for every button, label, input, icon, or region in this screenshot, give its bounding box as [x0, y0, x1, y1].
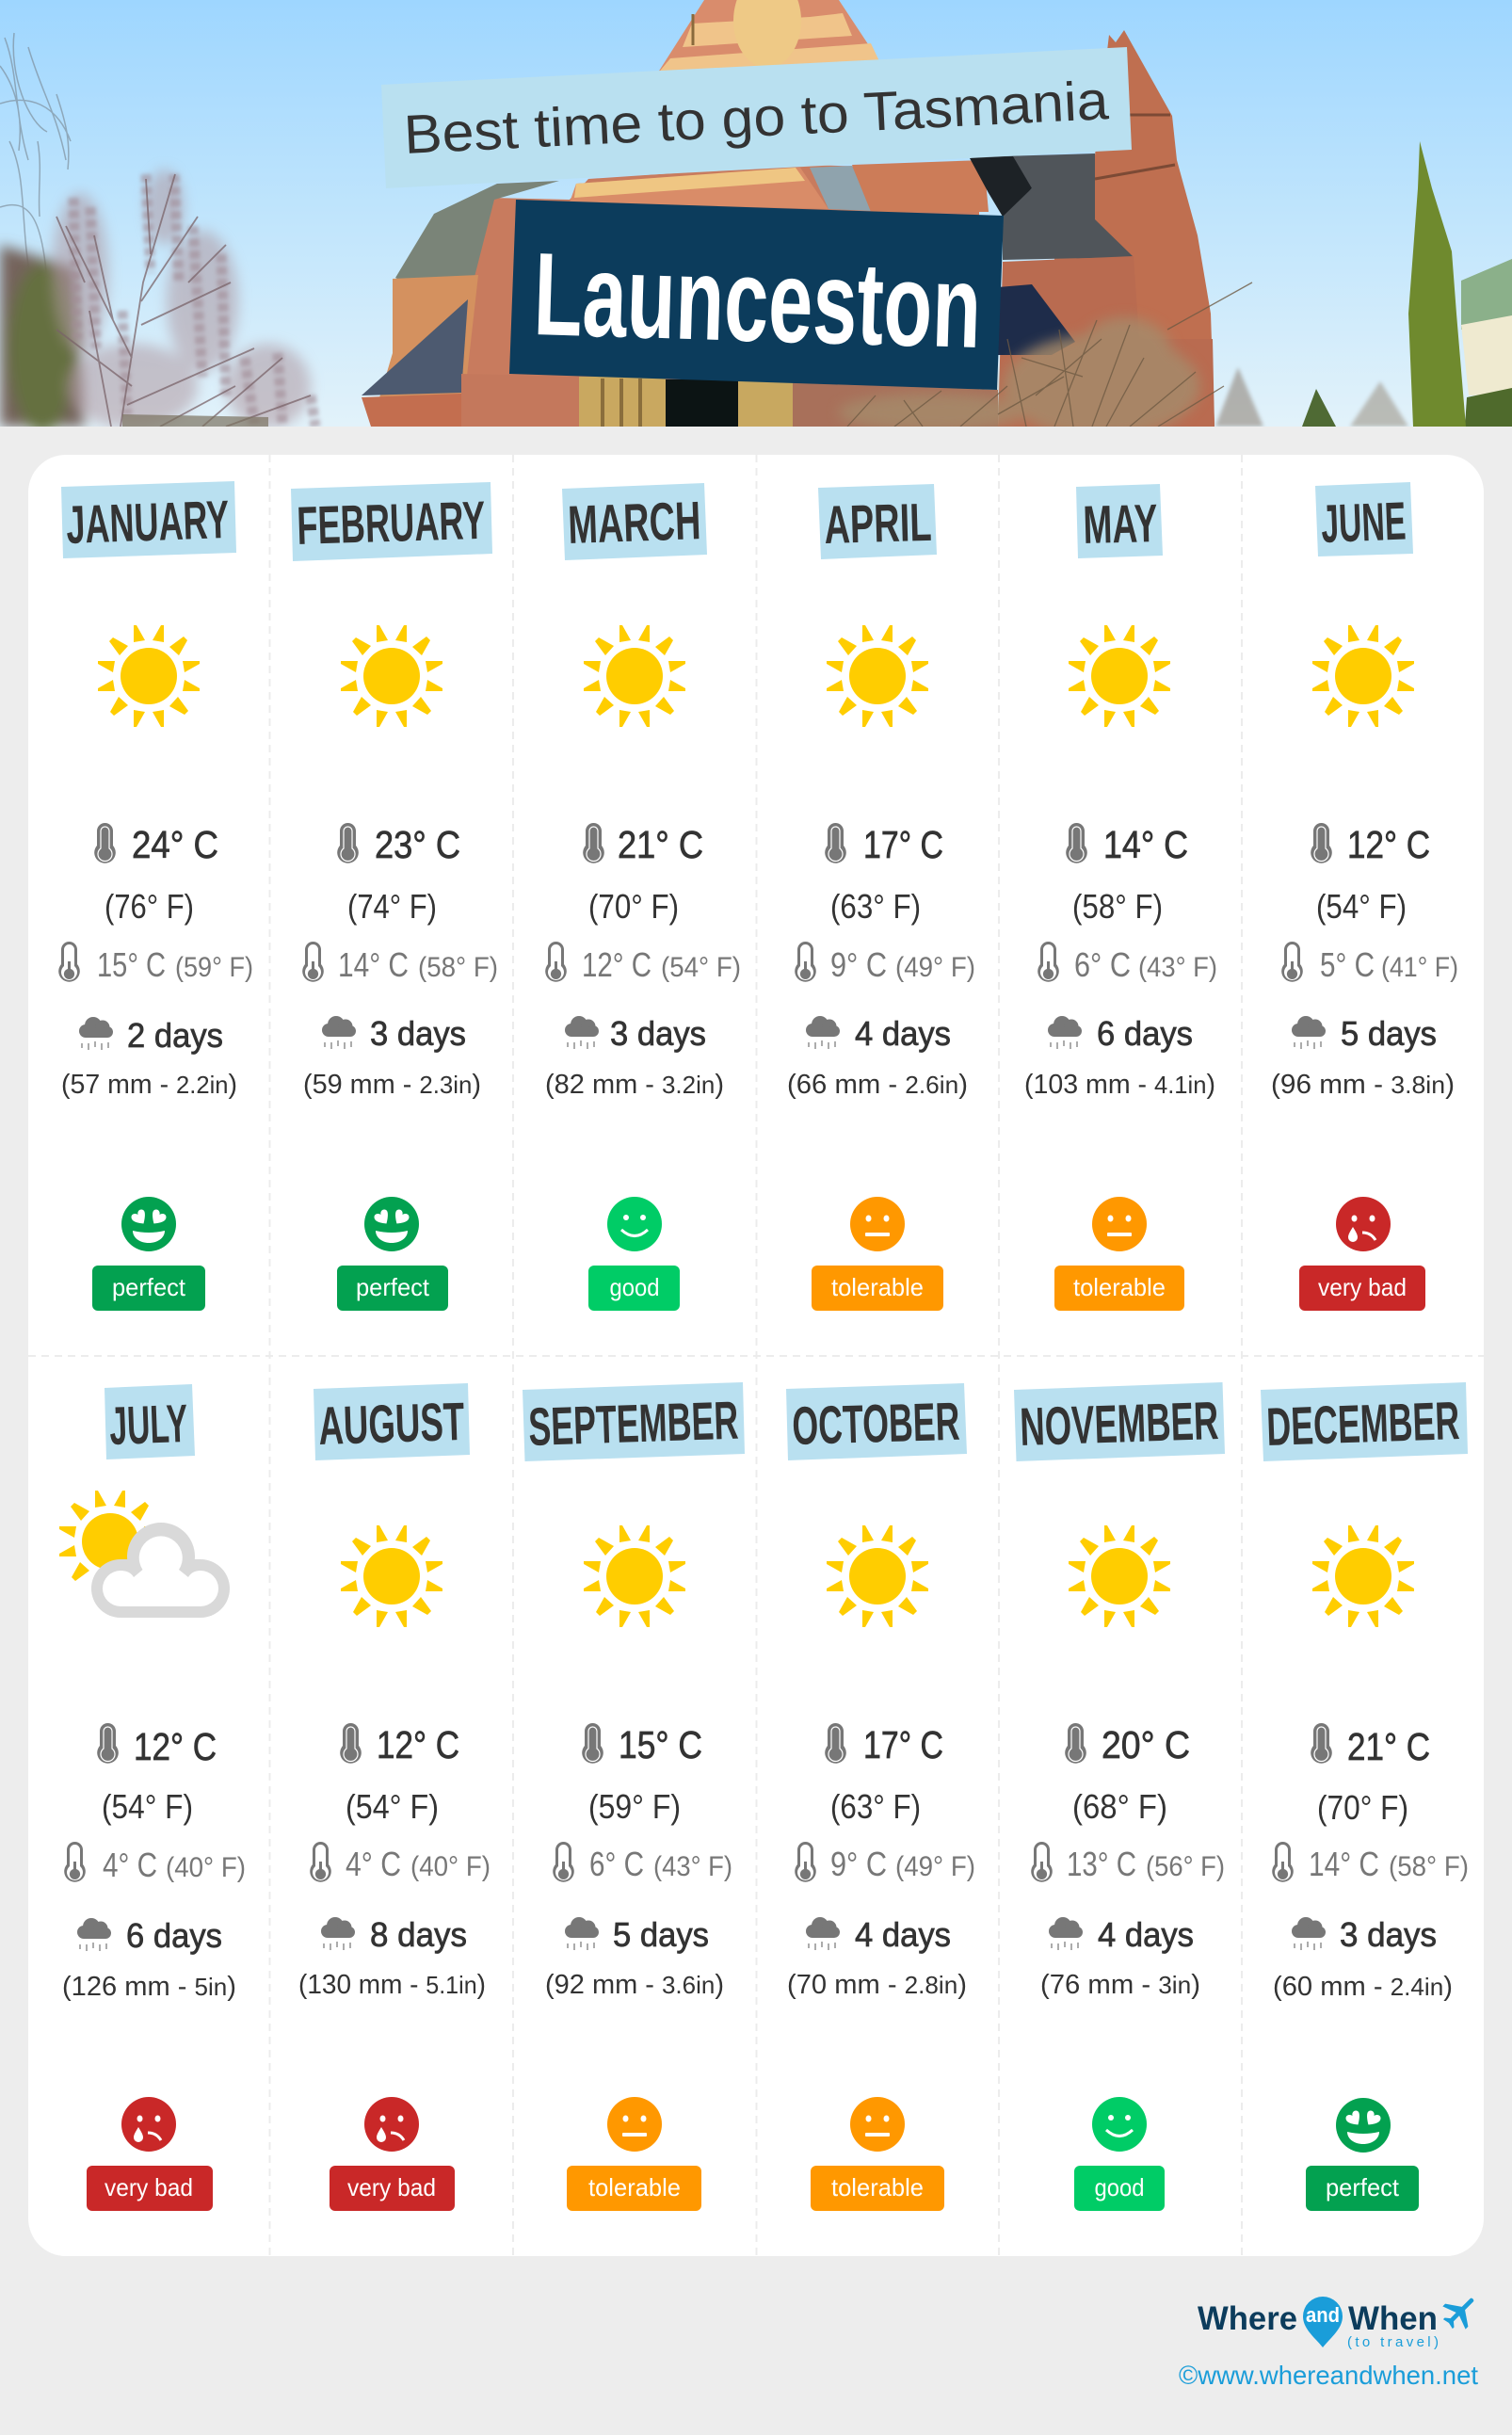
- rainfall: [1273, 1915, 1453, 2002]
- month label: July: JULY: [108, 1394, 188, 1457]
- month label: March: [562, 483, 707, 560]
- rainfall: [787, 1014, 968, 1100]
- header photo: Launceston church against blue sky: [0, 0, 1512, 438]
- low temperature: 6° C: [589, 1845, 644, 1883]
- rainfall: 4 days: [855, 1915, 951, 1954]
- rating: tolerable: tolerable: [588, 2173, 681, 2201]
- rainfall: [545, 1915, 724, 2000]
- rainfall: (82 mm - 3.2in): [545, 1070, 724, 1100]
- column: June: [1271, 482, 1458, 1311]
- rating: very bad: very bad: [1318, 1273, 1407, 1301]
- high temperature: 20° C: [1102, 1723, 1190, 1766]
- column: July: [59, 1384, 246, 2211]
- rainfall: (92 mm - 3.6in): [545, 1970, 724, 2000]
- month label: January: JANUARY: [65, 490, 230, 556]
- high temperature: [583, 823, 703, 926]
- low temperature: 9° C: [830, 1845, 887, 1883]
- rainfall: 5 days: [613, 1915, 709, 1954]
- high temperature: 12° C: [1347, 823, 1430, 866]
- rainfall: [545, 1014, 724, 1100]
- icon: map pin: [1303, 2297, 1343, 2347]
- month label: July: [105, 1384, 195, 1459]
- high temperature: (74° F): [347, 887, 437, 926]
- icon: sun behind cloud: [59, 1491, 230, 1618]
- icon: sun: [341, 625, 442, 727]
- high temperature: (63° F): [830, 887, 921, 926]
- low temperature: [795, 942, 975, 984]
- rainfall: 8 days: [370, 1915, 467, 1954]
- rainfall: [787, 1915, 967, 2000]
- low temperature: 14° C: [1309, 1845, 1379, 1883]
- high temperature: (70° F): [588, 887, 679, 926]
- rating: tolerable: tolerable: [831, 2173, 924, 2201]
- low temperature: (59° F): [175, 952, 253, 983]
- month label: September: [523, 1382, 745, 1461]
- rating: tolerable: [567, 2097, 701, 2211]
- low temperature: 6° C: [1074, 945, 1131, 984]
- month label: October: [786, 1383, 967, 1460]
- high temperature: 17° C: [863, 823, 943, 866]
- month label: September: SEPTEMBER: [527, 1391, 739, 1458]
- column: February: [291, 482, 498, 1311]
- rainfall: [61, 1016, 237, 1100]
- rainfall: [303, 1014, 481, 1100]
- high temperature: 21° C: [618, 823, 703, 866]
- low temperature: [1037, 942, 1217, 984]
- title banner: Launceston: [509, 200, 1004, 390]
- church body: [467, 166, 979, 390]
- rainfall: 4 days: [1098, 1915, 1194, 1954]
- month label: April: APRIL: [824, 492, 932, 556]
- high temperature: (54° F): [102, 1787, 193, 1826]
- high temperature: (58° F): [1072, 887, 1163, 926]
- high temperature: [94, 823, 218, 926]
- low temperature: [545, 942, 741, 984]
- month label: August: [314, 1383, 470, 1460]
- low temperature: 9° C: [830, 945, 887, 984]
- high temperature: 14° C: [1103, 823, 1188, 866]
- low temperature: [310, 1842, 491, 1883]
- rainfall: [298, 1915, 486, 2000]
- rating: perfect: [337, 1197, 448, 1311]
- subtitle banner: Best time to go to Tasmania: [402, 70, 1111, 166]
- church gable top: [656, 0, 879, 75]
- rainfall: 5 days: [1341, 1014, 1437, 1053]
- icon: sun: [827, 1525, 928, 1627]
- low temperature: [1281, 942, 1458, 984]
- rating: good: [1074, 2097, 1165, 2211]
- rating: tolerable: tolerable: [831, 1273, 924, 1301]
- rating: perfect: perfect: [1326, 2173, 1400, 2201]
- low temperature: 5° C: [1320, 945, 1375, 984]
- high temperature: [1065, 1723, 1190, 1826]
- rainfall: 4 days: [855, 1014, 951, 1053]
- icon: map pin: and: [1306, 2303, 1340, 2327]
- rainfall: 3 days: [1340, 1915, 1437, 1954]
- rating: perfect: [92, 1197, 205, 1311]
- low temperature: (49° F): [895, 952, 975, 983]
- column: September: [523, 1382, 745, 2211]
- rainfall: (70 mm - 2.8in): [787, 1970, 967, 2000]
- low temperature: [58, 942, 253, 984]
- column: October: [786, 1383, 975, 2211]
- icon: sun: [584, 625, 685, 727]
- rainfall: (130 mm - 5.1in): [298, 1970, 486, 2000]
- low temperature: 15° C: [97, 945, 166, 984]
- month label: May: MAY: [1083, 493, 1158, 556]
- month label: January: [61, 481, 236, 558]
- rating: very bad: [330, 2097, 455, 2211]
- rainfall: (96 mm - 3.8in): [1271, 1070, 1455, 1100]
- high temperature: 23° C: [375, 823, 460, 866]
- high temperature: 24° C: [132, 823, 218, 866]
- rating: very bad: very bad: [347, 2173, 436, 2201]
- icon: sun: [1069, 1525, 1170, 1627]
- low temperature: 4° C: [103, 1846, 157, 1884]
- column: May: [1024, 484, 1217, 1311]
- low temperature: [1272, 1842, 1469, 1883]
- low temperature: (40° F): [166, 1852, 246, 1883]
- icon: sun: [98, 625, 200, 727]
- rainfall: (57 mm - 2.2in): [61, 1070, 237, 1100]
- low temperature: (58° F): [1389, 1851, 1469, 1882]
- high temperature: 21° C: [1347, 1725, 1430, 1768]
- low temperature: (49° F): [895, 1851, 975, 1882]
- panel: monthly weather card: [28, 455, 1484, 2256]
- low temperature: [553, 1842, 732, 1883]
- rainfall: 6 days: [1097, 1014, 1193, 1053]
- column: March: [545, 483, 741, 1311]
- month label: February: FEBRUARY: [296, 491, 486, 556]
- footer logo: Where and When (to travel): [1198, 2287, 1485, 2350]
- rating: perfect: perfect: [356, 1273, 430, 1301]
- rainfall: (60 mm - 2.4in): [1273, 1972, 1453, 2002]
- month label: April: [818, 484, 937, 559]
- high temperature: [825, 1723, 943, 1826]
- month label: November: [1014, 1382, 1225, 1461]
- rating: very bad: [87, 2097, 213, 2211]
- high temperature: (63° F): [830, 1787, 921, 1826]
- month label: February: [291, 482, 492, 561]
- high temperature: (54° F): [1316, 887, 1407, 926]
- rainfall: 3 days: [610, 1014, 706, 1053]
- rainfall: [62, 1916, 236, 2002]
- footer logo: Where and When (to travel): Where: [1198, 2300, 1297, 2337]
- rainfall: [1271, 1014, 1455, 1100]
- low temperature: (58° F): [418, 952, 498, 983]
- low temperature: (54° F): [661, 952, 741, 983]
- icon: sun: [1312, 1525, 1414, 1627]
- left tree blossoms: [52, 169, 315, 428]
- footer logo: Where and When (to travel): (to travel): [1347, 2334, 1439, 2350]
- icon: sun: [1312, 625, 1414, 727]
- website credit: ©www.whereandwhen.net: [1179, 2361, 1478, 2390]
- rainfall: 6 days: [126, 1916, 222, 1955]
- high temperature: 15° C: [619, 1723, 702, 1766]
- high temperature: 12° C: [134, 1725, 217, 1768]
- high temperature: (68° F): [1072, 1787, 1167, 1826]
- church tower: [1054, 30, 1214, 427]
- icon: airplane: [1437, 2287, 1485, 2335]
- rating: very bad: [1299, 1197, 1425, 1311]
- column: January: [58, 481, 253, 1311]
- high temperature: (76° F): [105, 887, 194, 926]
- high temperature: 17° C: [863, 1723, 943, 1766]
- low temperature: [302, 942, 498, 984]
- high temperature: [340, 1723, 459, 1826]
- rating: tolerable: tolerable: [1073, 1273, 1166, 1301]
- high temperature: (70° F): [1317, 1788, 1408, 1827]
- icon: sun: [341, 1525, 442, 1627]
- rating: perfect: [1306, 2098, 1419, 2211]
- rainfall: (126 mm - 5in): [62, 1972, 236, 2002]
- month label: May: [1076, 484, 1163, 558]
- footer logo: Where and When (to travel): When: [1348, 2300, 1438, 2337]
- cypress tree: [1408, 141, 1466, 427]
- low temperature: 13° C: [1067, 1845, 1136, 1883]
- column: December: [1261, 1382, 1469, 2211]
- high temperature: 12° C: [377, 1723, 459, 1766]
- high temperature: [582, 1723, 702, 1826]
- column: August: [298, 1383, 491, 2211]
- low temperature: [795, 1842, 975, 1883]
- month label: November: NOVEMBER: [1019, 1391, 1219, 1458]
- month label: June: [1315, 482, 1413, 556]
- subtitle banner: [381, 47, 1132, 188]
- rating: very bad: very bad: [105, 2173, 193, 2201]
- month label: October: OCTOBER: [791, 1392, 960, 1457]
- rating: good: good: [1094, 2173, 1145, 2201]
- low temperature: [1031, 1842, 1225, 1883]
- low temperature: (56° F): [1146, 1851, 1225, 1882]
- low temperature: 12° C: [582, 945, 651, 984]
- low temperature: [64, 1842, 246, 1884]
- low temperature: (43° F): [653, 1851, 732, 1882]
- low temperature: (43° F): [1138, 952, 1217, 983]
- rainfall: (76 mm - 3in): [1040, 1970, 1200, 2000]
- rainfall: 3 days: [370, 1014, 466, 1053]
- rating: tolerable: [812, 1197, 943, 1311]
- rainfall: (59 mm - 2.3in): [303, 1070, 481, 1100]
- low temperature: (40° F): [410, 1851, 491, 1882]
- high temperature: [1066, 823, 1188, 926]
- rainfall: [1040, 1915, 1200, 2000]
- icon: sun: [1069, 625, 1170, 727]
- rating: good: [588, 1197, 680, 1311]
- low temperature: (41° F): [1381, 952, 1458, 983]
- high temperature: [337, 823, 460, 926]
- high temperature: (59° F): [588, 1787, 681, 1826]
- column: April: [787, 484, 975, 1311]
- rating: good: good: [610, 1273, 659, 1301]
- low temperature: 14° C: [338, 945, 409, 984]
- icon: sun: [827, 625, 928, 727]
- rating: perfect: perfect: [112, 1273, 186, 1301]
- high temperature: [97, 1723, 217, 1826]
- rainfall: 2 days: [127, 1016, 223, 1055]
- title banner: Launceston: Launceston: [532, 229, 983, 373]
- month label: June: JUNE: [1320, 492, 1407, 555]
- high temperature: [825, 823, 943, 926]
- high temperature: (54° F): [346, 1787, 439, 1826]
- right hotel building: [1461, 259, 1512, 427]
- rainfall: (66 mm - 2.6in): [787, 1070, 968, 1100]
- icon: sun: [584, 1525, 685, 1627]
- month label: March: MARCH: [567, 491, 701, 556]
- column: November: [1014, 1382, 1225, 2211]
- rainfall: [1024, 1014, 1215, 1100]
- low temperature: 4° C: [346, 1845, 401, 1883]
- rainfall: (103 mm - 4.1in): [1024, 1070, 1215, 1100]
- rating: tolerable: [1054, 1197, 1184, 1311]
- rating: tolerable: [811, 2097, 944, 2211]
- bush in front of church: [838, 282, 1252, 438]
- month label: August: AUGUST: [317, 1392, 465, 1457]
- high temperature: [1311, 1723, 1430, 1827]
- high temperature: [1311, 823, 1430, 926]
